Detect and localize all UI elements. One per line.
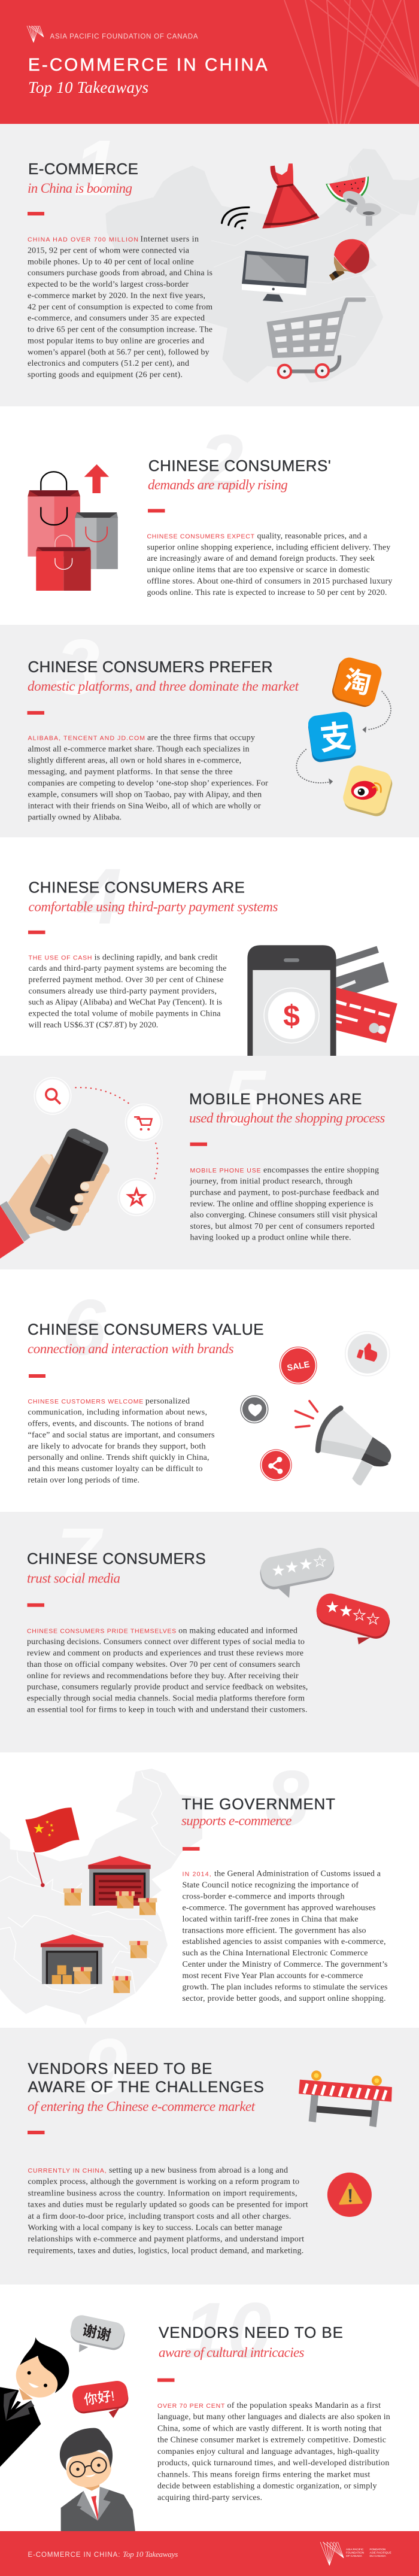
body text: interact with their friends on Sina Weibo, all of which are wholly or (28, 802, 261, 810)
accent bar (148, 509, 165, 512)
body text: China, some of which are vastly different. It is worth noting that (157, 2424, 382, 2433)
body text: communication, including information about news, (28, 1408, 207, 1417)
panel: takeaway 8 government support (0, 1769, 387, 2025)
body text (29, 953, 226, 1029)
body text: sector, provide better goods, and support online shopping. (182, 1994, 385, 2003)
body text: electronics and computers (51.2 per cent), and (28, 359, 189, 368)
body text: taxes and duties must be regularly updated so goods can be presented for import (28, 2201, 308, 2210)
body text: decide between establishing a domestic organization, or simply (157, 2481, 377, 2491)
icon: heart badge (241, 1396, 268, 1423)
heading: CHINESE CONSUMERS ARE (29, 878, 245, 896)
accent bar (28, 931, 45, 934)
body text: offers, events, and discounts. The notions of brand (28, 1420, 204, 1429)
subheading: connection and interaction with brands (28, 1341, 234, 1356)
icon: Alipay tile: 支 (318, 719, 353, 757)
icon: smartphone with dollar (247, 945, 336, 1056)
body text: encompasses the entire shopping (263, 1166, 379, 1175)
body text: of the population speaks Mandarin as a first (227, 2401, 381, 2410)
icon: red speech bubble (71, 2380, 130, 2418)
body text: channels. This means foreign firms entering the market must (157, 2470, 370, 2479)
body text: purchase and payment, to post-purchase feedback and (190, 1188, 379, 1197)
body text: online for reviews and recommendations before they buy. After receiving their (27, 1672, 299, 1681)
body text: consumers already use third-party payment providers, (29, 987, 217, 996)
body text: journey, from initial product research, through (189, 1177, 353, 1186)
heading (28, 2059, 264, 2096)
icon: loose box left (63, 1888, 82, 1906)
body text: sporting goods and equipment (26 per cent). (28, 370, 183, 379)
body text (28, 1397, 214, 1485)
subheading: aware of cultural intricacies (159, 2345, 305, 2360)
body text: personalized (145, 1397, 190, 1406)
body text: at a firm door-to-door price, including transport costs and all other charges. (28, 2212, 291, 2221)
body text: the Chinese consumer market is extremely competitive. Domestic (157, 2436, 386, 2444)
icon: Weibo tile (341, 763, 394, 818)
heading: VENDORS NEED TO BE (159, 2323, 343, 2341)
icon: grey review bubble (258, 1545, 336, 1598)
body text: slightly different areas, all own or hold shares in e-commerce, (28, 757, 241, 765)
heading: CHINESE CONSUMERS (27, 1550, 206, 1568)
heading: E-COMMERCE (28, 160, 138, 178)
big number 2: 2 (198, 418, 244, 506)
body text: ALIBABA, TENCENT AND JD.COM (28, 735, 145, 742)
panel: takeaway 9 vendor challenges (0, 2022, 419, 2285)
title: E-COMMERCE IN CHINA (28, 55, 268, 75)
heading: CHINESE CONSUMERS' (148, 457, 331, 475)
panel: header banner (0, 0, 419, 124)
dotted connectors (75, 1087, 157, 1180)
heading: AWARE OF THE CHALLENGES (28, 2078, 264, 2096)
big number 3: 3 (56, 623, 100, 711)
icon: grey warehouse with boxes (41, 1934, 104, 1984)
body text: having looked up a product online while there. (190, 1234, 351, 1243)
panel: takeaway 10 cultural intricacies (0, 2285, 419, 2532)
body text: e-commerce. The government has approved warehouses (182, 1903, 376, 1912)
map of China (0, 1769, 202, 2025)
icon: Taobao tile (330, 655, 384, 709)
subheading: in China is booming (28, 181, 132, 196)
body text: established agencies to assist companies with e-commerce, (182, 1937, 385, 1946)
body text: especially through social media channels. Social media platforms therefore form (27, 1694, 305, 1703)
big number 4: 4 (76, 852, 122, 940)
footer title: Top 10 Takeaways (123, 2550, 178, 2559)
icon: thumbs up badge (345, 1332, 390, 1376)
big number 7: 7 (56, 1512, 104, 1600)
body text: unique online items that are too expensive or scarce in domestic (147, 566, 370, 575)
big number 6: 6 (62, 1283, 107, 1371)
body text: requirements, taxes and duties, logistics, local product demand, and marketing. (28, 2246, 303, 2255)
dotted arrow: Taobao to Alipay (362, 691, 391, 733)
body text: CURRENTLY IN CHINA, (28, 2167, 107, 2174)
body text: women’s apparel (both at 56.7 per cent), followed by (28, 348, 210, 357)
body text: acquiring third-party services. (157, 2493, 262, 2502)
organisation name French: FONDATION (370, 2548, 385, 2551)
body text: are likely to advocate for brands they support, both (28, 1442, 206, 1451)
body text: MOBILE PHONE USE (190, 1167, 261, 1174)
icon: grey speech bubble: 谢谢 (81, 2322, 113, 2344)
icon: road barrier (299, 2070, 392, 2127)
body text: State Council notice recognizing the importance of (182, 1881, 359, 1890)
icon: sale badge: SALE (286, 1360, 311, 1373)
body text: are increasingly aware of and demand foreign products. They seek (147, 554, 375, 563)
body text: preferred payment method. Over 30 per cent of Chinese (29, 976, 224, 985)
icon: shopping bags (28, 472, 118, 591)
body text: products, quick turnaround times, and well-developed distribution (157, 2459, 389, 2468)
body text: goods online. This rate is expected to increase to 50 per cent by 2020. (147, 588, 387, 597)
accent bar (183, 1847, 200, 1851)
body text: personally and online. Trends shift quickly in China, (28, 1453, 210, 1462)
accent bar (28, 711, 44, 715)
big number 5: 5 (221, 1054, 266, 1142)
icon: share badge (260, 1450, 292, 1481)
body text: 2015, 92 per cent of whom were connected via (28, 247, 190, 255)
organisation name French: ASIE PACIFIQUE (370, 2551, 391, 2554)
icon: megaphone (295, 1401, 391, 1486)
big number 10: 10 (184, 2286, 271, 2374)
body text: cross-border e-commerce and imports through (182, 1892, 345, 1901)
icon: ping pong paddle (331, 239, 369, 278)
icon: credit cards (336, 946, 397, 1043)
body text: CHINESE CONSUMERS EXPECT (147, 533, 255, 540)
body text: retain over long periods of time. (28, 1476, 139, 1485)
subheading: of entering the Chinese e-commerce market (28, 2099, 256, 2114)
icon: businessman with glasses (60, 2428, 135, 2532)
body text: will reach US$6.3T (C$7.8T) by 2020. (29, 1020, 158, 1029)
panel: takeaway 1 e-commerce booming (0, 124, 419, 406)
subheading: used throughout the shopping process (189, 1111, 385, 1126)
icon: hand holding phone (0, 1126, 111, 1259)
icon: Taobao tile: 淘 (341, 666, 374, 700)
heading: VENDORS NEED TO BE (28, 2059, 212, 2077)
body text: review and comment on products and experiences and trust these reviews more (27, 1649, 303, 1658)
subheading: supports e-commerce (181, 1813, 292, 1828)
icon: wifi (222, 207, 249, 229)
icon: star bubble (118, 1178, 155, 1216)
body text: e-commerce, and consumers under 35 are expected (28, 314, 205, 323)
subtitle: Top 10 Takeaways (28, 78, 148, 96)
icon: watermelon (326, 177, 369, 202)
panel: takeaway 4 payment systems (0, 837, 419, 1056)
body text: companies enjoy cultural and language advantages, high-quality (157, 2447, 379, 2456)
body text: complex process, although the government is working on a reform program to (28, 2177, 299, 2186)
panel: takeaway 7 social media trust (0, 1512, 419, 1752)
accent bar (157, 2378, 175, 2382)
body text: to drive 65 per cent of the consumption increase. The (28, 326, 212, 335)
accent bar (29, 1374, 45, 1378)
body text: THE USE OF CASH (29, 954, 92, 961)
dotted arrow: Alipay to Weibo (296, 749, 333, 785)
body text: almost all e-commerce market share. Though each specializes in (28, 745, 249, 754)
organisation name English: ASIA PACIFIC (346, 2548, 364, 2551)
body text: messaging, and payment platforms. In that sense the three (28, 767, 232, 777)
body text (28, 235, 212, 379)
icon: businessman leaning in (0, 2337, 69, 2467)
body text: such as the China International Electronic Commerce (182, 1949, 368, 1958)
body text: CHINA HAD OVER 700 MILLION (28, 236, 138, 244)
body text: most recent Five Year Plan accounts for e-commerce (182, 1972, 363, 1980)
footer title: E-COMMERCE IN CHINA: (28, 2551, 120, 2559)
body text (27, 1626, 308, 1714)
body text: IN 2014, (182, 1871, 211, 1878)
body text: quality, reasonable prices, and a (257, 531, 368, 541)
icon: sale badge (280, 1347, 317, 1384)
body text: most popular items to buy online are groceries and (28, 336, 204, 345)
body text: consumers purchase goods from abroad, and China is (28, 269, 212, 278)
body text: purchase, consumers regularly provide product and service feedback on websites, (27, 1683, 308, 1692)
body text (28, 734, 268, 822)
body text: streamline business across the country. Information on import requirements, (28, 2189, 297, 2198)
body text: example, consumers will shop on Taobao, pay with Alipay, and then (28, 790, 262, 800)
body text (28, 2166, 308, 2255)
icon: warning sign (327, 2173, 372, 2217)
organisation name English: OF CANADA (346, 2554, 363, 2557)
body text: review. The online and offline shopping experience is (190, 1199, 374, 1208)
panel: takeaway 6 brand interaction (0, 1269, 419, 1512)
subheading: trust social media (27, 1570, 120, 1585)
accent bar (28, 2131, 44, 2134)
body text: stores, but almost 70 per cent of consumers reported (190, 1222, 375, 1231)
map of China (105, 148, 419, 383)
body text: relationships with e-commerce and payment platforms, and understand import (28, 2235, 304, 2244)
body text: are the three firms that occupy (147, 734, 255, 742)
icon: red dress (262, 163, 319, 229)
organisation name French (370, 2548, 391, 2557)
body text: CHINESE CUSTOMERS WELCOME (28, 1398, 143, 1405)
heading: MOBILE PHONES ARE (189, 1090, 362, 1108)
body text: and this means customer loyalty can be difficult to (28, 1465, 202, 1474)
body text (182, 1870, 388, 2003)
body text: than those on official company websites. Over 70 per cent of consumers search (27, 1660, 300, 1669)
body text: is declining rapidly, and bank credit (95, 953, 218, 962)
organisation name English (346, 2548, 364, 2557)
body text: language, but many other languages and dialects are also spoken in (157, 2413, 390, 2422)
body text: companies are competing to develop ‘one-stop shop’ experiences. For (28, 779, 268, 788)
organisation name French: DU CANADA (370, 2554, 386, 2557)
panel: takeaway 3 domestic platforms (0, 623, 419, 837)
body text: Internet users in (140, 235, 199, 244)
body text: cards and third-party payment systems are becoming the (29, 964, 226, 973)
body text: 42 per cent of consumption is expected to come from (28, 303, 212, 312)
big number 1: 1 (74, 124, 118, 212)
organisation name: ASIA PACIFIC FOUNDATION OF CANADA (50, 34, 198, 41)
body text: the General Administration of Customs issued a (214, 1870, 381, 1878)
icon: red warehouse with boxes (88, 1856, 157, 1915)
body text: partially owned by Alibaba. (28, 813, 122, 822)
panel: takeaway 5 mobile phones (0, 1054, 419, 1269)
body text: expected to be the world’s largest cross-border (28, 280, 189, 289)
panel: takeaway 2 consumer demands (0, 406, 419, 625)
body text: expected the total volume of mobile payments in China (29, 1009, 221, 1019)
organisation name English: FOUNDATION (346, 2551, 364, 2554)
subheading: comfortable using third-party payment systems (29, 900, 278, 915)
subheading: demands are rapidly rising (148, 477, 288, 492)
heading: CHINESE CONSUMERS PREFER (28, 658, 273, 676)
body text: mobile phones. Up to 40 per cent of local online (28, 257, 194, 266)
body text: setting up a new business from abroad is a long and (109, 2166, 288, 2175)
body text: OVER 70 PER CENT (157, 2402, 225, 2410)
body text: purchasing decisions. Consumers connect over different types of social media to (27, 1638, 305, 1647)
body text: CHINESE CONSUMERS PRIDE THEMSELVES (27, 1627, 176, 1635)
icon: loose box bottom (112, 1976, 131, 1993)
body text: on making educated and informed (178, 1626, 297, 1635)
body text: transactions more efficient. The government has also (182, 1926, 366, 1935)
big number 9: 9 (83, 2022, 127, 2110)
icon: cart bubble (125, 1104, 162, 1141)
body text: such as Alipay (Alibaba) and WeChat Pay (Tencent). It is (29, 998, 222, 1007)
icon: shopping cart (267, 300, 364, 378)
body text (189, 1166, 379, 1243)
icon: foundation logo (320, 2542, 344, 2565)
accent bar (28, 1603, 44, 1607)
body text: “face” and social status are important, and consumers (28, 1430, 214, 1440)
subheading: domestic platforms, and three dominate the market (28, 679, 299, 694)
big number 8: 8 (265, 1754, 309, 1842)
icon: loose box right (129, 1941, 148, 1958)
body text: superior online shopping experience, including efficient delivery. They (147, 543, 390, 552)
icon: red review bubble (314, 1590, 393, 1644)
heading: CHINESE CONSUMERS VALUE (28, 1320, 264, 1338)
body text: growth. The plan includes reforms to stimulate the services (182, 1983, 388, 1992)
body text: e-commerce market by 2020. In the next five years, (28, 291, 205, 300)
panel: footer (0, 2531, 419, 2576)
body text: located within tariff-free zones in China that make (182, 1915, 358, 1924)
icon: rising arrow (84, 464, 109, 493)
body text: also converging. Chinese consumers still visit physical (190, 1211, 378, 1220)
icon: Chinese flag (25, 1808, 80, 1887)
body text: an essential tool for firms to keep in touch with and understand their customers. (27, 1705, 307, 1714)
icon: search bubble (34, 1077, 71, 1114)
body text: offline stores. About one-third of consumers in 2015 purchased luxury (147, 577, 392, 586)
body text (157, 2401, 390, 2502)
footer title (28, 2550, 178, 2559)
icon: mushrooms (340, 188, 381, 226)
icon: foundation logo (27, 26, 44, 42)
body text: Center under the Ministry of Commerce. The government’s (182, 1960, 388, 1969)
body text: Working with a local company is key to success. Locals can better manage (28, 2223, 283, 2232)
heading: THE GOVERNMENT (182, 1795, 335, 1813)
accent bar (190, 1143, 207, 1146)
icon: Alipay tile (307, 710, 357, 763)
icon: computer monitor (242, 251, 309, 302)
accent bar (28, 212, 44, 215)
icon: red speech bubble: 你好! (83, 2388, 116, 2407)
body text (147, 531, 392, 597)
icon: smartphone with dollar: $ (283, 1000, 300, 1033)
icon: grey speech bubble (68, 2313, 127, 2352)
